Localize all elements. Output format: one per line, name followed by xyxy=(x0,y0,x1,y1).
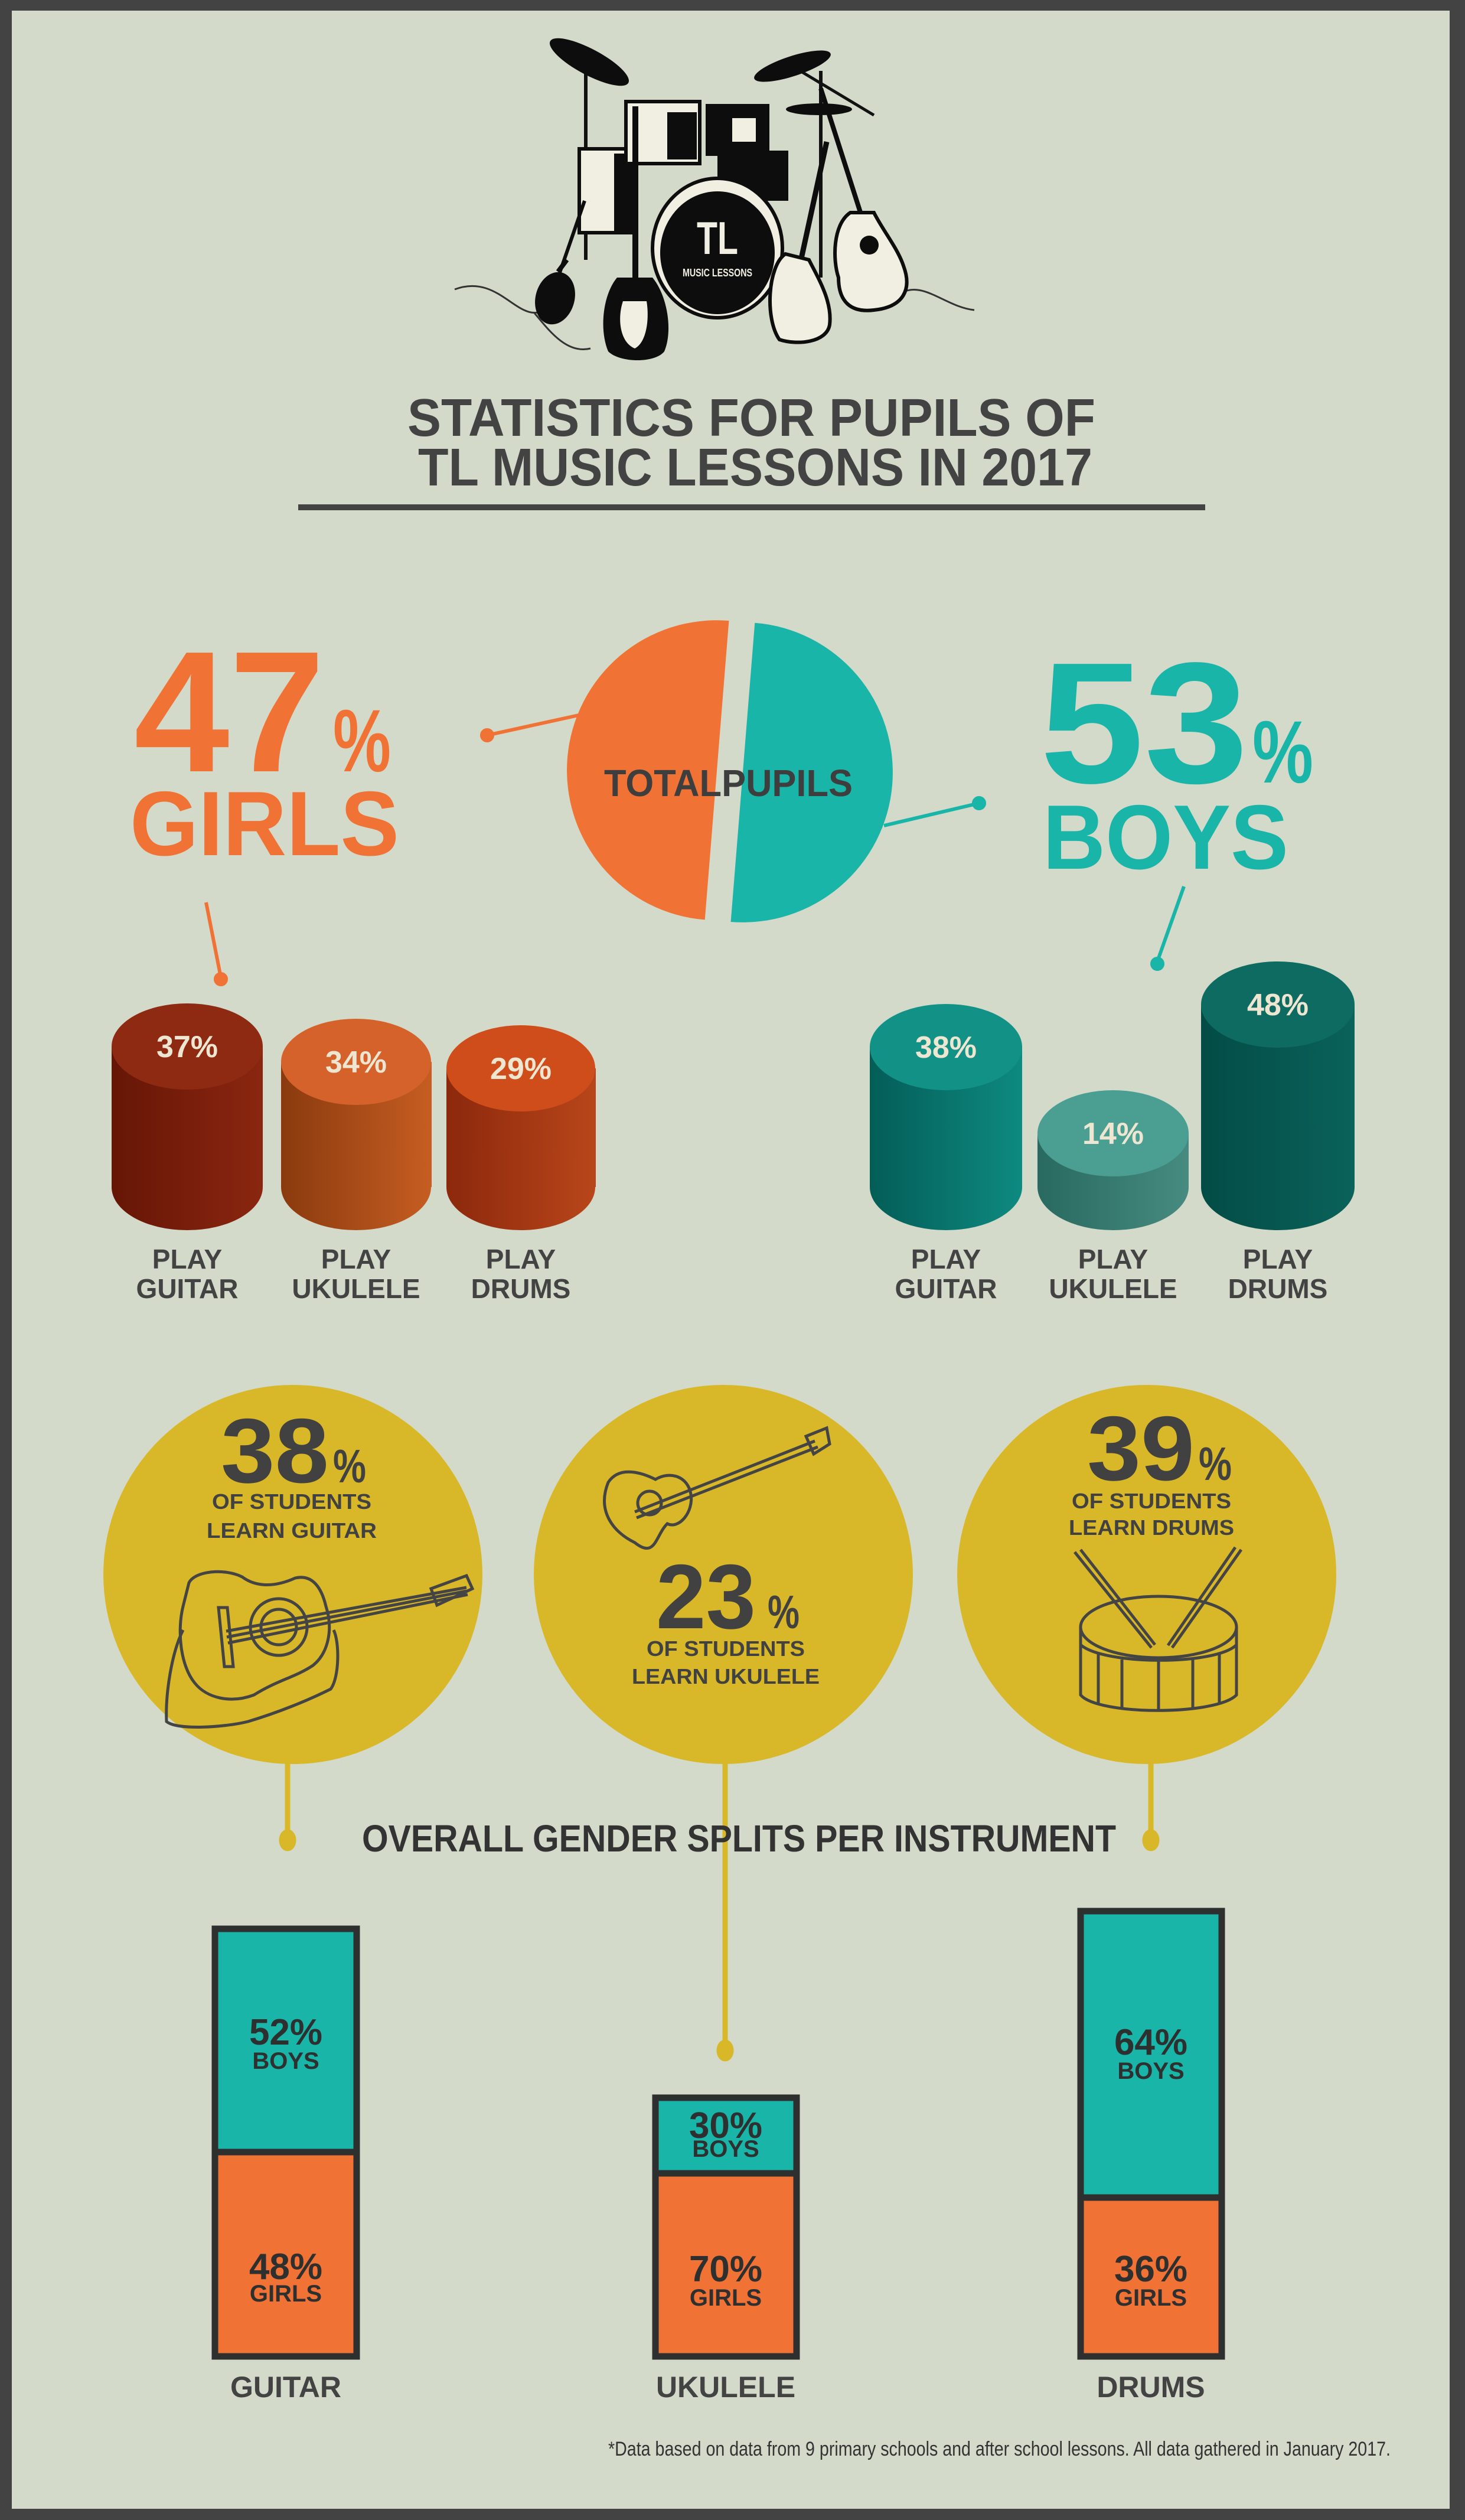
boys cylinder labels: PLAY xyxy=(911,1244,981,1274)
girls stat 47% xyxy=(130,615,399,875)
circle: drums 39% xyxy=(957,1385,1336,1764)
circle: ukulele 23%: LEARN UKULELE xyxy=(632,1664,820,1688)
circle: guitar 38%: OF STUDENTS xyxy=(212,1489,371,1514)
bar labels: GUITAR xyxy=(230,2371,341,2404)
section heading: gender splits: OVERALL GENDER SPLITS PER INSTRUMENT xyxy=(362,1817,1116,1860)
title: TL MUSIC LESSONS IN 2017 xyxy=(418,438,1092,497)
bar: ukulele gender split: BOYS xyxy=(692,2136,759,2162)
pie chart: total pupils xyxy=(556,609,904,934)
circle: ukulele 23%: % xyxy=(768,1586,800,1638)
circle: guitar 38% xyxy=(103,1385,482,1764)
title: STATISTICS FOR PUPILS OF xyxy=(407,389,1095,448)
bar labels xyxy=(230,2371,1205,2404)
bar: drums gender split: 64% xyxy=(1114,2022,1187,2063)
circle: ukulele 23% xyxy=(534,1385,913,1764)
circle: drums 39%: % xyxy=(1199,1437,1232,1490)
logo: drum kit with guitars: MUSIC LESSONS xyxy=(683,267,752,279)
bar: ukulele gender split: 70% xyxy=(689,2249,762,2290)
bar: guitar gender split xyxy=(215,1929,357,2356)
cylinder: boys drums 48%: 48% xyxy=(1247,988,1309,1022)
bar labels: DRUMS xyxy=(1097,2371,1205,2404)
girls cylinder labels: DRUMS xyxy=(471,1273,570,1304)
cylinder: girls guitar 37%: 37% xyxy=(156,1030,218,1064)
boys cylinder labels: PLAY xyxy=(1243,1244,1313,1274)
girls cylinder labels: PLAY xyxy=(321,1244,391,1274)
logo: drum kit with guitars xyxy=(455,30,974,360)
icon: snare drum with sticks xyxy=(1075,1547,1241,1711)
cylinder: girls guitar 37% xyxy=(112,1003,263,1230)
bar labels: UKULELE xyxy=(656,2371,795,2404)
cylinder: girls ukulele 34% xyxy=(281,1019,432,1230)
pie chart: total pupils: TOTALPUPILS xyxy=(604,762,853,804)
circle: guitar 38%: LEARN GUITAR xyxy=(207,1518,377,1543)
icon: acoustic guitar xyxy=(167,1572,472,1727)
circle: ukulele 23%: 23 xyxy=(656,1546,756,1648)
girls stat 47%: 47 xyxy=(134,615,325,808)
bar: ukulele gender split: GIRLS xyxy=(690,2285,762,2311)
cylinder: boys ukulele 14% xyxy=(1037,1090,1189,1230)
cylinder: boys guitar 38%: 38% xyxy=(915,1031,977,1065)
boys stat 53%: % xyxy=(1252,702,1313,801)
bar: ukulele gender split: 30% xyxy=(689,2105,762,2146)
bar: guitar gender split: BOYS xyxy=(252,2048,319,2074)
cylinder: boys guitar 38% xyxy=(870,1004,1022,1230)
cylinder: girls ukulele 34%: 34% xyxy=(325,1045,387,1080)
boys stat 53% xyxy=(1040,627,1313,888)
cylinder: girls drums 29% xyxy=(446,1025,596,1230)
boys stat 53%: 53 xyxy=(1040,627,1248,819)
boys stat 53%: BOYS xyxy=(1043,786,1288,888)
connector: pie to boys xyxy=(884,798,1184,969)
boys cylinder labels: GUITAR xyxy=(895,1273,997,1304)
icon: ukulele xyxy=(605,1428,830,1548)
boys cylinder labels xyxy=(895,1244,1327,1304)
bar: guitar gender split: GIRLS xyxy=(250,2281,322,2307)
boys cylinders xyxy=(870,961,1355,1230)
cylinder: girls drums 29%: 29% xyxy=(490,1052,552,1086)
girls cylinder labels: PLAY xyxy=(152,1244,222,1274)
boys cylinder labels: UKULELE xyxy=(1049,1273,1177,1304)
circle: guitar 38%: 38 xyxy=(221,1400,329,1502)
bar: drums gender split: 36% xyxy=(1114,2249,1187,2290)
girls cylinders xyxy=(112,1003,596,1230)
connector: pie to girls xyxy=(206,715,579,984)
circle: drums 39%: OF STUDENTS xyxy=(1072,1489,1231,1513)
girls stat 47%: GIRLS xyxy=(130,772,399,875)
cylinder: boys ukulele 14%: 14% xyxy=(1082,1117,1144,1151)
title xyxy=(407,389,1095,497)
bar: guitar gender split: 52% xyxy=(249,2012,322,2053)
girls cylinder labels: UKULELE xyxy=(292,1273,420,1304)
bar: ukulele gender split xyxy=(655,2098,797,2356)
boys cylinder labels: PLAY xyxy=(1078,1244,1148,1274)
bar: drums gender split: GIRLS xyxy=(1115,2285,1187,2311)
girls cylinder labels: PLAY xyxy=(486,1244,556,1274)
girls stat 47%: % xyxy=(333,691,391,790)
girls cylinder labels: GUITAR xyxy=(136,1273,238,1304)
circle: guitar 38%: % xyxy=(333,1440,366,1492)
circle: drums 39%: 39 xyxy=(1087,1397,1195,1499)
logo: drum kit with guitars: TL xyxy=(697,212,738,264)
circle: drums 39%: LEARN DRUMS xyxy=(1069,1515,1234,1540)
cylinder: boys drums 48% xyxy=(1201,961,1355,1230)
circle: ukulele 23%: OF STUDENTS xyxy=(647,1636,805,1661)
girls cylinder labels xyxy=(136,1244,570,1304)
bar: guitar gender split: 48% xyxy=(249,2247,322,2287)
bar: drums gender split xyxy=(1081,1911,1222,2356)
bar: drums gender split: BOYS xyxy=(1117,2058,1185,2084)
boys cylinder labels: DRUMS xyxy=(1228,1273,1327,1304)
connector lines from circles xyxy=(282,1748,1157,2059)
